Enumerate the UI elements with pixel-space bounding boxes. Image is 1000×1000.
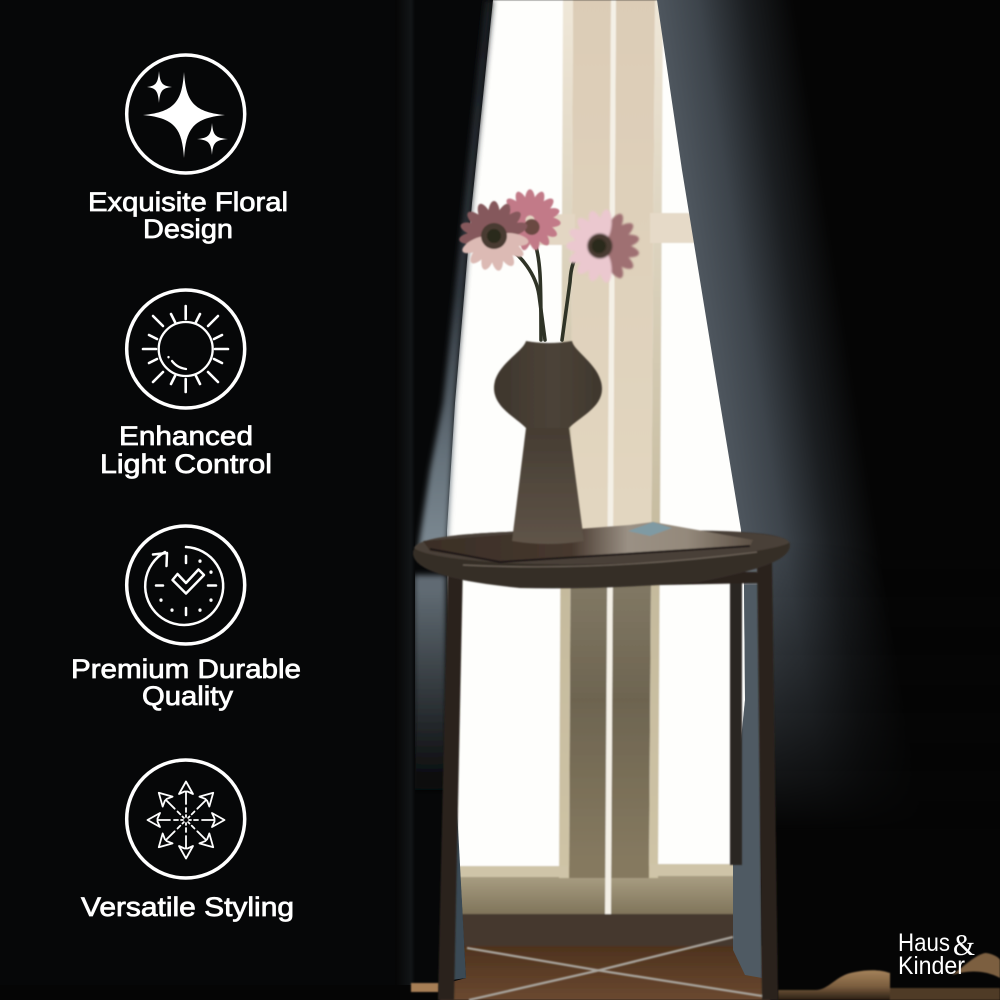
heading: Premium Durable: Premium Durable	[71, 654, 301, 684]
window scene	[440, 0, 770, 1000]
feature: Exquisite Floral Design	[88, 55, 288, 244]
wooden floor	[440, 946, 770, 1000]
left mullion	[480, 214, 575, 245]
magazine	[423, 522, 753, 562]
window frame right trim	[649, 0, 663, 878]
table highlight	[463, 552, 757, 567]
left curtain dark body	[0, 0, 493, 985]
icon: arrows radiating	[127, 760, 245, 878]
right mullion	[650, 213, 700, 243]
heading: Quality: Quality	[142, 681, 234, 711]
icon: sparkles	[127, 55, 245, 173]
back leg	[730, 580, 742, 865]
small star right	[197, 123, 228, 155]
patch left	[411, 983, 439, 992]
icon: clock with check	[127, 526, 245, 644]
feature: Premium Durable Quality	[71, 526, 301, 711]
flower: left gerbera	[459, 201, 530, 271]
window frame left stile	[569, 0, 611, 878]
window frame left trim	[559, 0, 573, 878]
heading: Versatile Styling: Versatile Styling	[81, 892, 294, 922]
vase foot	[512, 428, 584, 544]
lower sill trim right	[650, 864, 740, 876]
feature: Enhanced Light Control	[100, 290, 272, 479]
magazine cover picture	[628, 522, 672, 536]
left curtain	[0, 0, 493, 985]
feature: Versatile Styling	[81, 760, 294, 922]
side table	[413, 522, 790, 1000]
patch far right	[952, 953, 1000, 978]
skirting wall	[440, 914, 750, 948]
logo: Haus & Kinder: Haus	[898, 929, 950, 957]
patch centre right	[778, 970, 890, 1000]
vase	[494, 341, 602, 544]
logo: Haus & Kinder	[898, 927, 975, 980]
left curtain lit edge	[418, 0, 493, 550]
heading: Exquisite Floral: Exquisite Floral	[88, 187, 288, 217]
heading: Light Control: Light Control	[100, 449, 272, 479]
table rim	[413, 530, 790, 588]
stems	[502, 235, 590, 340]
lower wall rail	[450, 866, 740, 914]
floor light patches	[411, 953, 1000, 1000]
patch bottom	[890, 988, 1000, 1000]
flower: back pink gerbera	[499, 189, 561, 251]
large star	[143, 72, 225, 158]
heading: Enhanced: Enhanced	[119, 421, 253, 451]
small star left	[147, 71, 172, 103]
left front leg	[438, 562, 463, 1000]
dark fold	[395, 0, 415, 985]
table underside	[463, 570, 760, 588]
heading: Design: Design	[143, 214, 233, 244]
left curtain hem	[452, 790, 466, 980]
right curtain lower lit panel	[733, 585, 762, 978]
left curtain lower lit panel	[414, 575, 446, 790]
right curtain	[657, 0, 874, 978]
logo: Haus & Kinder: Kinder	[898, 952, 965, 980]
flowers and vase	[459, 189, 640, 544]
window frame right stile	[611, 0, 655, 878]
base cross legs	[467, 937, 762, 1000]
bright gap between shutters	[605, 0, 616, 914]
flower: right gerbera	[566, 209, 640, 283]
bright window glass	[440, 0, 760, 880]
vase body	[494, 341, 602, 428]
logo: Haus & Kinder: &	[953, 927, 975, 962]
right curtain body	[657, 0, 874, 802]
table top surface	[414, 530, 789, 564]
right front leg	[757, 555, 778, 1000]
icon: sun	[127, 290, 245, 408]
magazine lower edge	[430, 546, 750, 562]
lower sill trim left	[450, 866, 568, 877]
